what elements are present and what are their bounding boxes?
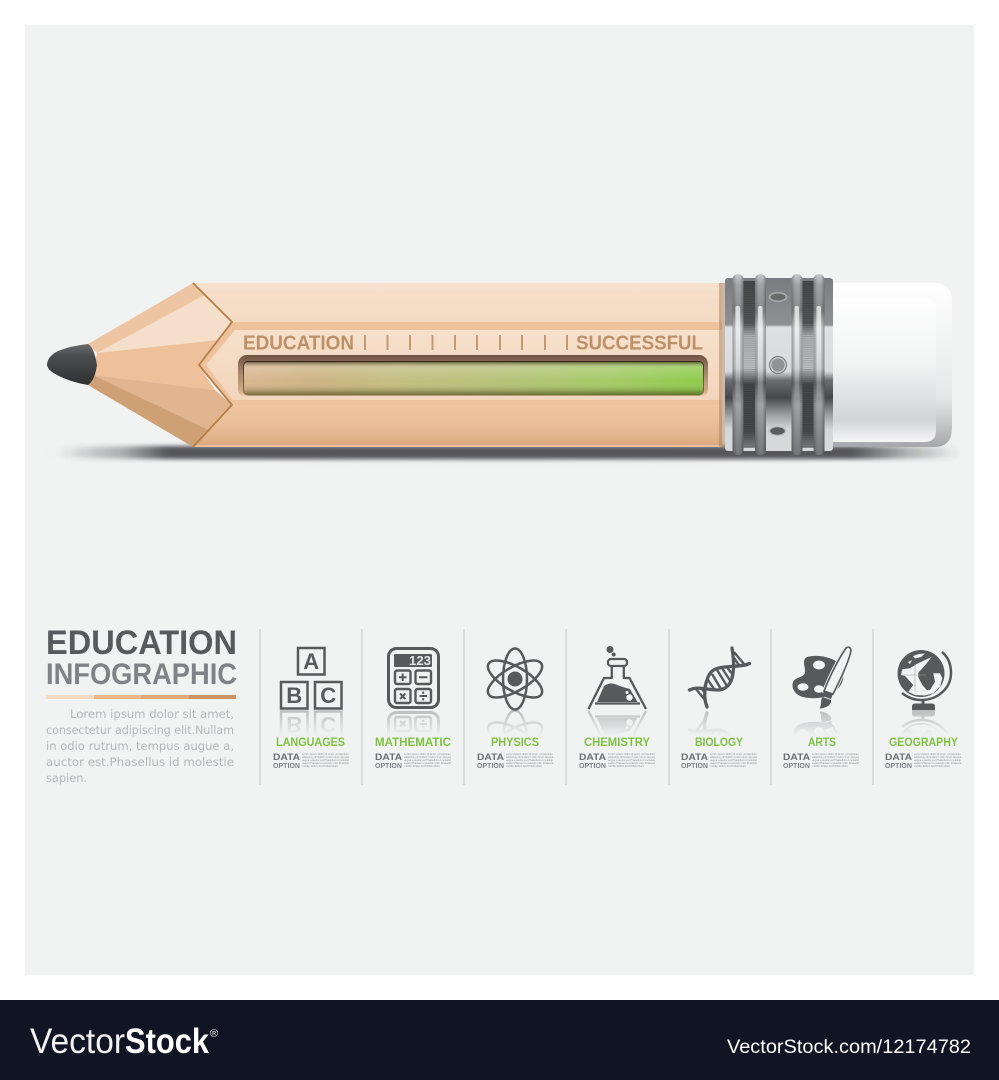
heading: education infographic: INFOGRAPHIC [46,658,237,691]
column: biology [681,648,758,772]
label: LANGUAGES [276,735,345,749]
heading: education infographic [46,624,237,691]
heading colour rule [46,695,236,699]
label: ARTS [808,735,836,749]
data option: Lorem ipsum dolor sit amet, consectetur [302,752,349,756]
icon: abc blocks: B [286,683,302,708]
footer logo: Vector [30,1022,125,1061]
intro paragraph: Lorem ipsum dolor sit amet, [70,707,234,721]
label: successful: SUCCESSFUL [576,332,703,354]
data option: adipiscing elit Nullam in odio rutrum tempus [506,755,554,759]
eraser [832,283,952,447]
intro paragraph: in odio rutrum, tempus augue a, [46,739,234,753]
data option: sapien Praesent a suscipit enim Praesent [608,761,655,765]
ferrule rings [732,274,824,455]
data option: adipiscing elit Nullam in odio rutrum tempus [608,755,656,759]
icon: abc blocks: A [303,649,319,674]
data option: mollis tellus sed bibendum [914,764,950,768]
data option: augue a auctor est Phasellus id molestie [506,758,554,762]
data option [375,752,452,770]
data option: Lorem ipsum dolor sit amet, consectetur [608,752,655,756]
icon: abc blocks: C [320,683,336,708]
progress bar green gradient [243,361,704,396]
data option: DATA [783,752,810,763]
data option: OPTION [783,761,810,770]
knurled bands [743,281,814,448]
pencil lead [47,344,97,385]
data option: adipiscing elit Nullam in odio rutrum tempus [812,755,860,759]
data option [681,752,758,770]
data option: mollis tellus sed bibendum [506,764,542,768]
label: BIOLOGY [695,735,743,749]
data option: OPTION [681,761,708,770]
data option: augue a auctor est Phasellus id molestie [404,758,452,762]
data option: adipiscing elit Nullam in odio rutrum tempus [710,755,758,759]
data option: mollis tellus sed bibendum [302,764,338,768]
column: physics [477,648,554,772]
data option: DATA [273,752,300,763]
pencil body lower section [193,405,722,447]
data option: Lorem ipsum dolor sit amet, consectetur [506,752,553,756]
data option: OPTION [885,761,912,770]
metal ferrule [719,274,833,455]
intro paragraph: auctor est.Phasellus id molestie [46,755,234,769]
data option [273,752,350,770]
footer image id: VectorStock.com/12174782 [727,1036,971,1058]
reflection [280,710,343,732]
inner panel [206,330,722,400]
icon: calculator: 123 [409,654,431,668]
data option: DATA [477,752,504,763]
data option: augue a auctor est Phasellus id molestie [302,758,350,762]
footer logo: Stock [125,1022,209,1061]
data option [477,752,554,770]
data option: mollis tellus sed bibendum [608,764,644,768]
scalloped wood edge [193,283,232,447]
intro paragraph [46,707,234,785]
reflection [486,710,544,732]
footer logo: ® [210,1028,218,1040]
icon: dna helix [690,648,750,707]
data option: augue a auctor est Phasellus id molestie [710,758,758,762]
intro paragraph: sapien. [46,771,87,785]
reflection [793,712,836,732]
data option: augue a auctor est Phasellus id molestie [812,758,860,762]
data option: OPTION [273,761,300,770]
column: chemistry [579,646,656,774]
data option: adipiscing elit Nullam in odio rutrum tempus [404,755,452,759]
data option: sapien Praesent a suscipit enim Praesent [506,761,553,765]
footer logo [30,1022,218,1061]
data option: OPTION [579,761,606,770]
data option: DATA [681,752,708,763]
column: geography [885,650,962,770]
reflection [688,711,728,732]
label: GEOGRAPHY [889,735,958,749]
label: MATHEMATIC [375,735,451,749]
data option: sapien Praesent a suscipit enim Praesent [404,761,451,765]
data option: Lorem ipsum dolor sit amet, consectetur [914,752,961,756]
label: CHEMISTRY [584,735,650,749]
scale ticks [365,335,567,350]
label: PHYSICS [491,735,539,749]
data option: mollis tellus sed bibendum [710,764,746,768]
data option: OPTION [375,761,402,770]
rivets [768,292,788,436]
data option: mollis tellus sed bibendum [812,764,848,768]
data option [579,752,656,770]
label: education: EDUCATION [243,332,354,354]
icon: palette and brush [792,647,851,708]
data option: Lorem ipsum dolor sit amet, consectetur [710,752,757,756]
reflection [387,711,440,732]
footer bar [0,1000,999,1080]
icon: flask [588,646,646,709]
column: languages [273,648,350,772]
pencil wood tip [88,283,232,447]
data option: Lorem ipsum dolor sit amet, consectetur [812,752,859,756]
pencil shadow [60,446,960,460]
progress slot frame [238,355,708,398]
data option: sapien Praesent a suscipit enim Praesent [812,761,859,765]
reflection [588,710,647,732]
column: arts [783,647,860,773]
data option: DATA [375,752,402,763]
heading: education infographic: EDUCATION [46,624,237,662]
pencil body centre band [199,322,722,405]
data option: sapien Praesent a suscipit enim Praesent [914,761,961,765]
data option: DATA [579,752,606,763]
data option: OPTION [477,761,504,770]
data option: Lorem ipsum dolor sit amet, consectetur [404,752,451,756]
data option: DATA [885,752,912,763]
data option: adipiscing elit Nullam in odio rutrum tempus [302,755,350,759]
data option: mollis tellus sed bibendum [404,764,440,768]
reflection [902,710,948,732]
data option [783,752,860,770]
column: mathematic [375,648,452,772]
data option: adipiscing elit Nullam in odio rutrum tempus [914,755,962,759]
pencil [47,274,952,455]
data option: sapien Praesent a suscipit enim Praesent [710,761,757,765]
data option: augue a auctor est Phasellus id molestie [608,758,656,762]
icon: globe [898,650,951,710]
intro paragraph: consectetur adipiscing elit.Nullam [46,723,234,737]
icon: abc blocks [281,648,342,708]
data option: augue a auctor est Phasellus id molestie [914,758,962,762]
data option: sapien Praesent a suscipit enim Praesent [302,761,349,765]
pencil body upper section [193,283,722,323]
data option [885,752,962,770]
icon: atom [483,648,547,710]
